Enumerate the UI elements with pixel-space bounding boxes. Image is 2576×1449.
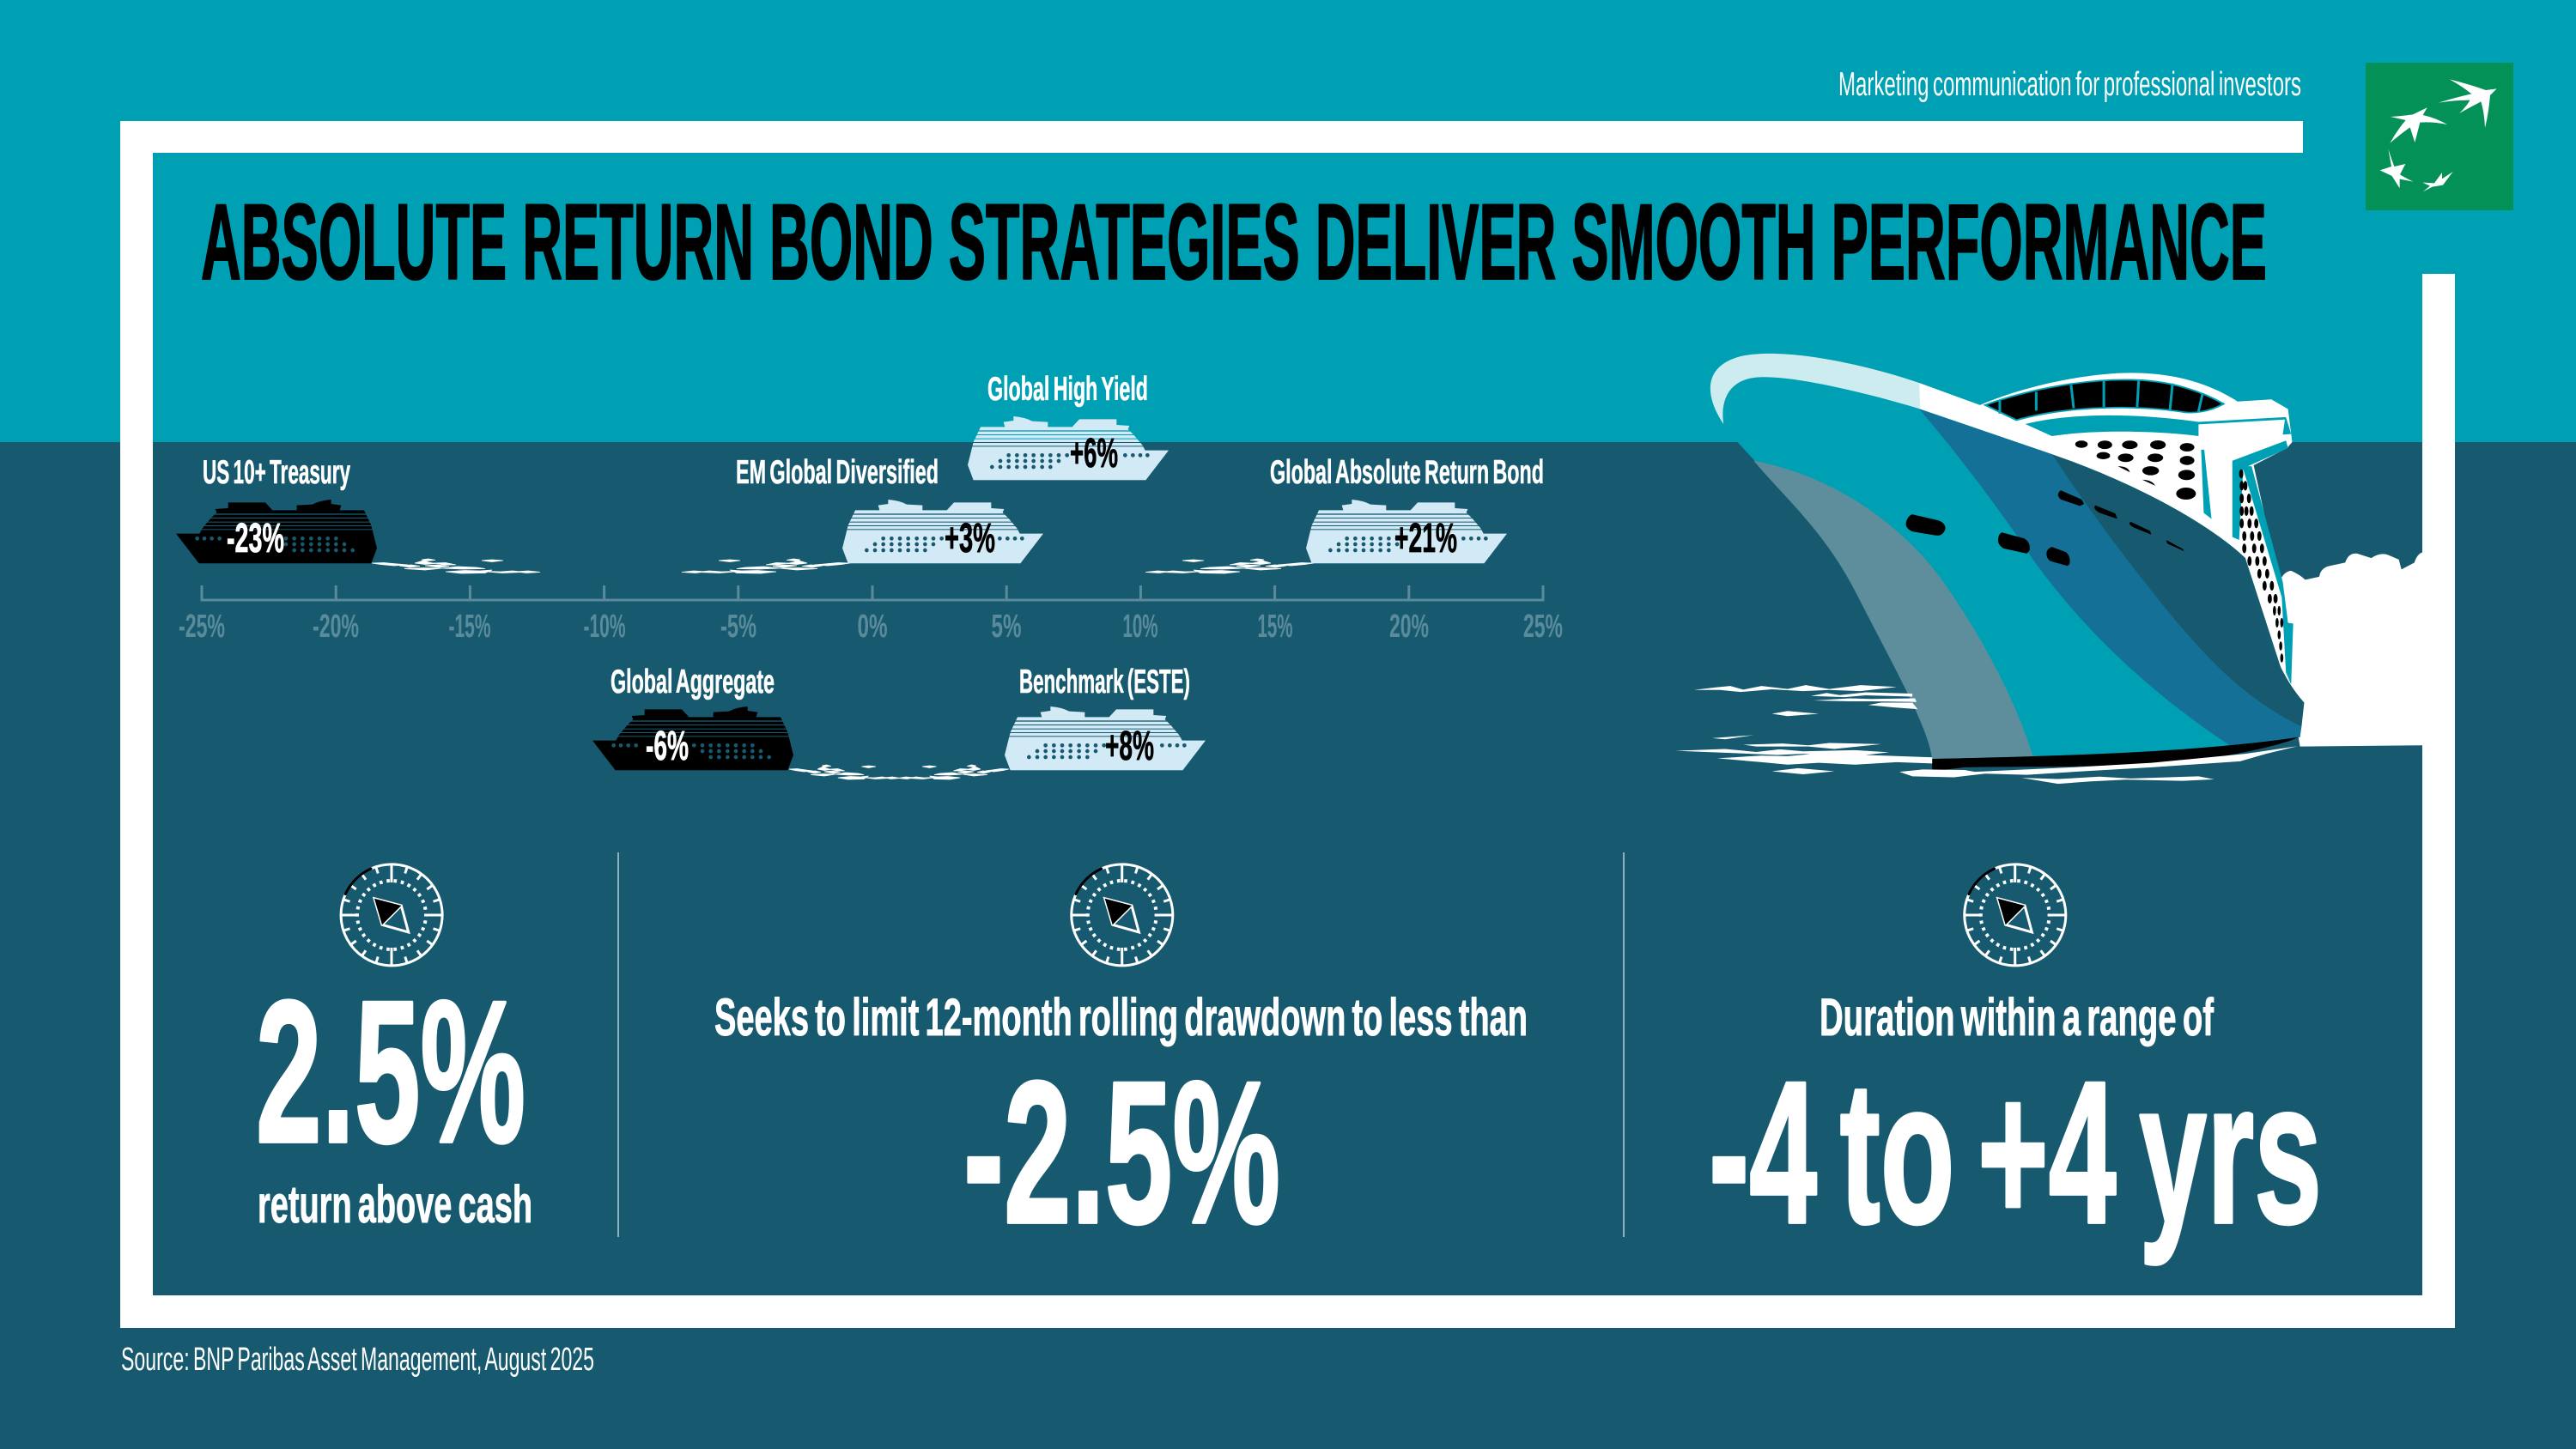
- panel: return target: [256, 864, 532, 1234]
- header note: Marketing communication for professional investors: [1838, 66, 2301, 103]
- caption: Duration within a range of: [1820, 988, 2214, 1046]
- divider left: [617, 852, 619, 1237]
- marker: Benchmark (ESTE): [898, 664, 1208, 779]
- icon: compass: [341, 864, 442, 966]
- ship main teal hull: [1723, 377, 2304, 759]
- marker: Global High Yield: +6%: [1070, 431, 1118, 476]
- marker: US 10+ Treasury: US 10+ Treasury: [203, 454, 350, 491]
- icon: compass: [1072, 864, 1173, 966]
- ship pale bow rail: [1710, 354, 1920, 424]
- axis labels: 0%: [857, 609, 888, 645]
- axis labels: -25%: [179, 609, 225, 645]
- axis labels: [179, 609, 1563, 645]
- axis labels: -5%: [720, 609, 756, 645]
- ship black keel: [1932, 737, 2299, 771]
- ship white superstructure: [1919, 373, 2304, 727]
- marker: Global Aggregate: -6%: [646, 724, 689, 769]
- caption: return above cash: [258, 1175, 532, 1234]
- marker: Benchmark (ESTE): +8%: [1105, 724, 1154, 769]
- marker: Global Absolute Return Bond: +21%: [1394, 516, 1457, 561]
- ship blue hull stripe: [1919, 409, 2301, 745]
- ship round cabin windows: [2075, 440, 2196, 500]
- panel: duration range: [1709, 864, 2322, 1266]
- ship side balcony windows: [2239, 470, 2283, 663]
- ship bridge windows: [1985, 379, 2223, 420]
- marker: Global Absolute Return Bond: [1145, 454, 1544, 573]
- axis labels: 20%: [1389, 609, 1429, 645]
- ship teal side trim: [2201, 440, 2293, 684]
- white frame: [120, 121, 2455, 1328]
- ship hull portholes: [1906, 490, 2184, 566]
- source note: Source: BNP Paribas Asset Management, August 2025: [121, 1342, 594, 1378]
- axis line and ticks: [202, 585, 1543, 600]
- marker: EM Global Diversified: [682, 454, 1046, 573]
- marker: US 10+ Treasury: -23%: [227, 516, 284, 561]
- axis labels: 15%: [1257, 609, 1293, 645]
- logo: BNP Paribas green square with stars: [2366, 63, 2513, 210]
- caption: Seeks to limit 12-month rolling drawdown to less than: [714, 988, 1528, 1046]
- big figure: -2.5%: [963, 1040, 1280, 1266]
- panel: drawdown limit: [714, 864, 1528, 1266]
- chart: return axis with ship markers: [173, 371, 1563, 779]
- illustration: large cruise ship bow with foam and water reflections: [1675, 354, 2423, 784]
- divider right: [1623, 852, 1625, 1237]
- marker: Global Aggregate: [590, 664, 900, 779]
- marker: Benchmark (ESTE): Benchmark (ESTE): [1019, 664, 1190, 700]
- big figure: 2.5%: [256, 959, 526, 1185]
- water reflections: [1675, 685, 2298, 784]
- axis labels: -10%: [584, 609, 625, 645]
- foam behind stern: [2281, 552, 2423, 747]
- marker: Global High Yield: [965, 371, 1171, 481]
- marker: US 10+ Treasury: [173, 454, 540, 573]
- marker: Global Absolute Return Bond: Global Absolute Return Bond: [1270, 454, 1544, 491]
- marker: EM Global Diversified: +3%: [945, 516, 995, 561]
- ship dark hull stripe: [2052, 454, 2304, 727]
- axis labels: -15%: [448, 609, 491, 645]
- axis labels: -20%: [313, 609, 359, 645]
- ship teal bridge trim: [2026, 415, 2291, 436]
- axis labels: 25%: [1523, 609, 1563, 645]
- icon: compass: [1965, 864, 2066, 966]
- marker: Global High Yield: Global High Yield: [987, 371, 1148, 408]
- marker: Global Aggregate: Global Aggregate: [611, 664, 775, 700]
- marker: EM Global Diversified: EM Global Diversified: [736, 454, 939, 491]
- axis labels: 10%: [1123, 609, 1157, 645]
- ship grey-blue hull panel: [1753, 461, 2033, 759]
- axis labels: 5%: [991, 609, 1022, 645]
